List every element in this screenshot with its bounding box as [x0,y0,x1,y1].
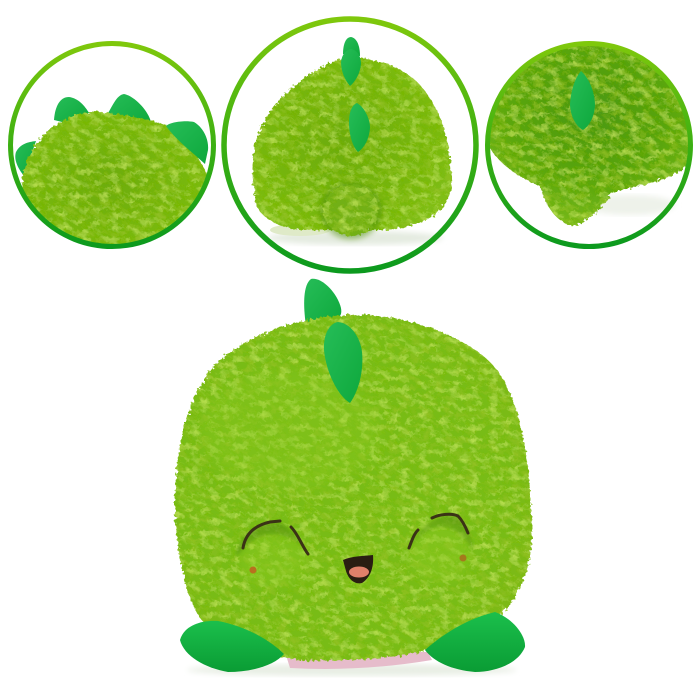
left cheek fold [240,534,308,586]
icon: center top spike [341,49,361,86]
mouth [343,555,373,583]
icon: left circle right spike [166,121,208,164]
icon: front spike [324,322,362,403]
center circle fur body [253,57,451,230]
left cheek [250,566,256,574]
left eye [243,521,308,554]
center circle ring [224,19,476,271]
tongue [349,566,369,578]
icon: top back spike [304,279,341,326]
right cheek [460,554,466,562]
right circle fur body [490,46,688,226]
right eye [409,514,468,548]
icon: center tail [323,184,379,236]
center circle ground shadow [267,231,443,245]
main ground shadow [187,664,517,676]
main fur body [175,315,532,660]
right circle ground shadow [585,195,675,215]
panel: left circle, top view with spikes [10,44,214,246]
pink underside [285,652,432,669]
right eye fold shadow [405,515,474,552]
panel: center circle, back view with tail [224,19,476,271]
icon: center lower spike [349,103,370,152]
icon: center rear spike [343,37,360,56]
icon: left foot [180,621,284,672]
icon: left circle rear spikes [15,94,151,176]
left eye fold shadow [236,523,312,556]
center circle underside [270,224,330,236]
tail shadow [320,183,382,239]
icon: right circle spike [570,71,595,130]
left circle fur body [22,112,209,246]
body highlight [200,370,380,490]
icon: right foot [425,612,525,672]
right circle ring [488,44,690,246]
panel: right circle, close-up with spike and tail [482,40,700,246]
right cheek fold [408,522,472,582]
panel: main plush front view [175,279,532,676]
left circle ring [10,44,214,246]
